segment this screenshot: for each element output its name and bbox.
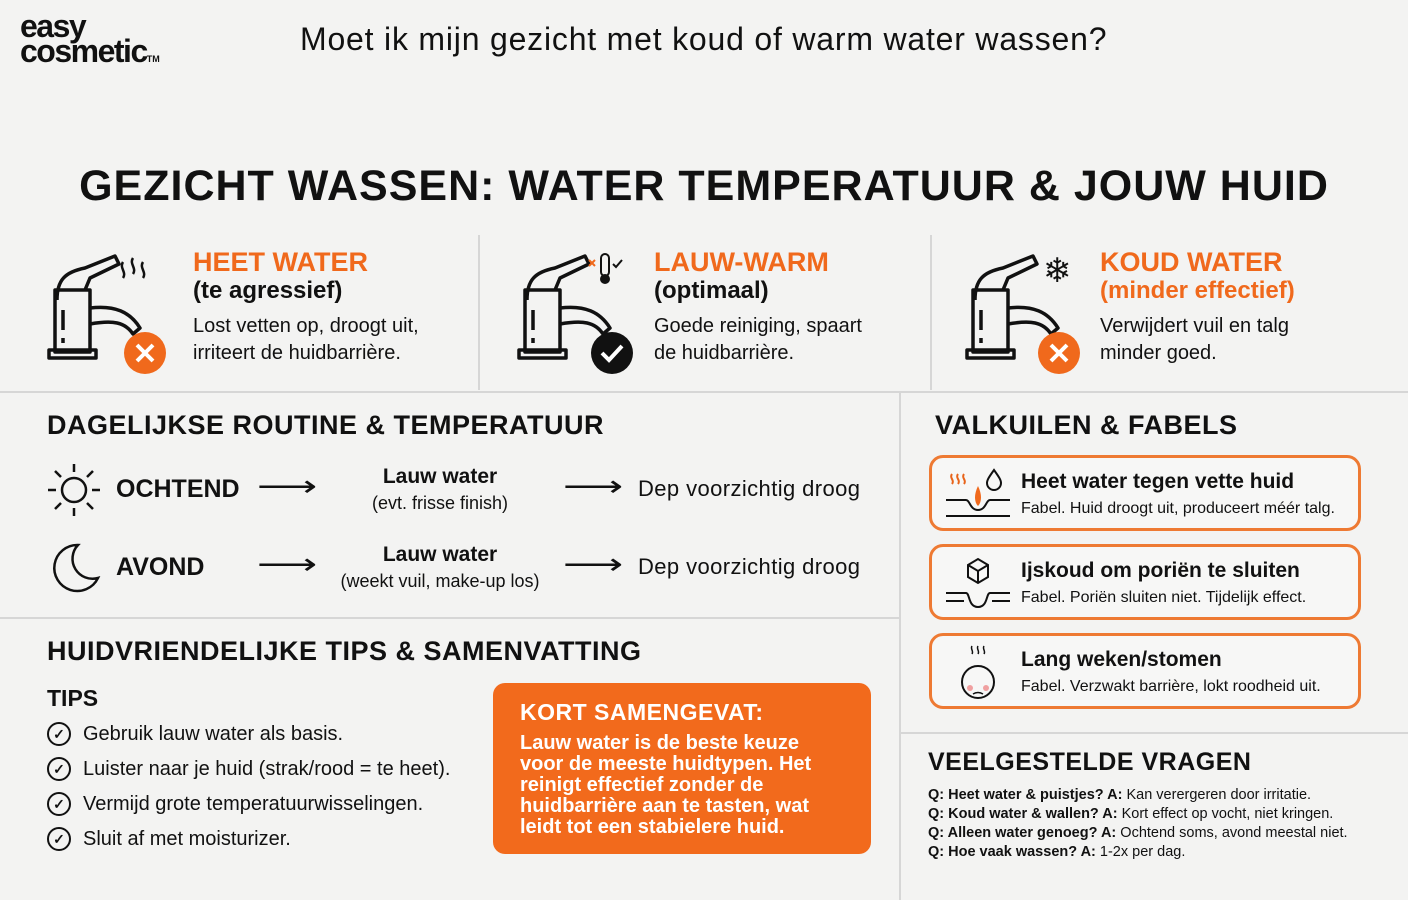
faq list bbox=[928, 787, 1348, 860]
panel: koud water: Verwijdert vuil en talg bbox=[1100, 315, 1289, 337]
panel: lauw-warm: Goede reiniging, spaart bbox=[654, 315, 862, 337]
panel: lauw-warm: de huidbarrière. bbox=[654, 342, 794, 364]
icon: faucet hot bbox=[47, 254, 166, 374]
card: heet water myth bbox=[929, 455, 1361, 531]
icon: faucet cold bbox=[965, 252, 1080, 374]
card: ijskoud myth: Ijskoud om poriën te sluiten bbox=[1021, 559, 1300, 582]
callout: kort samengevat bbox=[493, 683, 871, 854]
card: ijskoud myth bbox=[929, 544, 1361, 620]
card: heet water myth: Heet water tegen vette huid bbox=[1021, 470, 1294, 493]
heading: HEET WATER bbox=[193, 247, 368, 277]
card: stomen myth bbox=[929, 633, 1361, 709]
routine: ochtend: Lauw water bbox=[383, 465, 497, 488]
routine: ochtend: (evt. frisse finish) bbox=[372, 493, 508, 513]
heading: routine: DAGELIJKSE ROUTINE & TEMPERATUUR bbox=[47, 410, 604, 440]
subtitle: Moet ik mijn gezicht met koud of warm water wassen? bbox=[300, 21, 1107, 57]
logo bbox=[20, 8, 160, 69]
routine: ochtend bbox=[48, 464, 860, 516]
panel: lauw-warm: LAUW-WARM bbox=[654, 247, 829, 277]
faq list: Q: Koud water & wallen? A: Kort effect op vocht, niet kringen. bbox=[928, 806, 1333, 822]
logo: easy bbox=[20, 8, 85, 44]
icon: face steam bbox=[961, 646, 995, 699]
routine: avond: ⟶ bbox=[563, 548, 623, 581]
tips list bbox=[47, 685, 450, 851]
tips list: Vermijd grote temperatuurwisselingen. bbox=[83, 792, 423, 814]
faq list: Q: Alleen water genoeg? A: Ochtend soms, avond meestal niet. bbox=[928, 825, 1348, 841]
callout: kort samengevat: KORT SAMENGEVAT: bbox=[520, 699, 764, 725]
callout: kort samengevat: Lauw water is de beste keuze voor de meeste huidtypen. Het reinigt effectief zonder de huidbarrière aan te tasten, wat leidt tot een stabielere huid. bbox=[520, 732, 811, 838]
panel: heet water: irriteert de huidbarrière. bbox=[193, 342, 401, 364]
tips list: Luister naar je huid (strak/rood = te heet). bbox=[83, 758, 450, 780]
card: ijskoud myth: Fabel. Poriën sluiten niet. Tijdelijk effect. bbox=[1021, 589, 1306, 606]
panel: koud water: KOUD WATER bbox=[1100, 247, 1282, 277]
title: GEZICHT WASSEN: WATER TEMPERATUUR & JOUW HUID bbox=[79, 162, 1329, 210]
card: stomen myth: Fabel. Verzwakt barrière, lokt roodheid uit. bbox=[1021, 678, 1321, 695]
routine: avond bbox=[53, 543, 860, 592]
logo: cosmeticTM bbox=[20, 33, 160, 69]
panel: heet water: (te agressief) bbox=[193, 277, 342, 304]
routine: avond: Dep voorzichtig droog bbox=[638, 554, 860, 579]
panel: koud water: (minder effectief) bbox=[1100, 277, 1295, 304]
heading: tips: HUIDVRIENDELIJKE TIPS & SAMENVATTING bbox=[47, 636, 642, 666]
icon: ice cube bbox=[946, 558, 1010, 608]
routine: avond: (weekt vuil, make-up los) bbox=[340, 571, 540, 591]
faq list: Q: Heet water & puistjes? A: Kan verergeren door irritatie. bbox=[928, 787, 1311, 803]
tips list: ✓ bbox=[53, 830, 65, 846]
routine: ochtend: ⟶ bbox=[257, 470, 317, 503]
routine: avond: AVOND bbox=[116, 553, 204, 581]
tips list: ✓ bbox=[53, 726, 65, 742]
panel: heet water bbox=[47, 247, 419, 374]
card: heet water myth: Fabel. Huid droogt uit, produceert méér talg. bbox=[1021, 500, 1335, 517]
panel: koud water: minder goed. bbox=[1100, 342, 1217, 364]
tips list: ✓ bbox=[53, 760, 65, 776]
icon: sun bbox=[48, 464, 100, 516]
routine: avond: Lauw water bbox=[383, 543, 497, 566]
icon: skin heat bbox=[946, 468, 1010, 517]
icon: faucet cold: ❄ bbox=[1043, 252, 1072, 290]
panel: lauw-warm bbox=[517, 247, 862, 374]
tips list: TIPS bbox=[47, 685, 98, 711]
routine: avond: ⟶ bbox=[257, 548, 317, 581]
heading: valkuilen: VALKUILEN & FABELS bbox=[935, 410, 1238, 440]
heading: faq: VEELGESTELDE VRAGEN bbox=[928, 748, 1251, 776]
panel: heet water: Lost vetten op, droogt uit, bbox=[193, 315, 419, 337]
faq list: Q: Hoe vaak wassen? A: 1-2x per dag. bbox=[928, 844, 1185, 860]
tips list: Gebruik lauw water als basis. bbox=[83, 722, 343, 744]
routine: ochtend: ⟶ bbox=[563, 470, 623, 503]
routine: ochtend: Dep voorzichtig droog bbox=[638, 476, 860, 501]
tips list: Sluit af met moisturizer. bbox=[83, 828, 291, 850]
icon: faucet ok bbox=[517, 253, 633, 374]
tips list: ✓ bbox=[53, 796, 65, 812]
panel: lauw-warm: (optimaal) bbox=[654, 277, 769, 304]
panel: koud water bbox=[965, 247, 1295, 374]
card: stomen myth: Lang weken/stomen bbox=[1021, 648, 1222, 671]
icon: moon bbox=[53, 544, 100, 592]
routine: ochtend: OCHTEND bbox=[116, 475, 240, 503]
